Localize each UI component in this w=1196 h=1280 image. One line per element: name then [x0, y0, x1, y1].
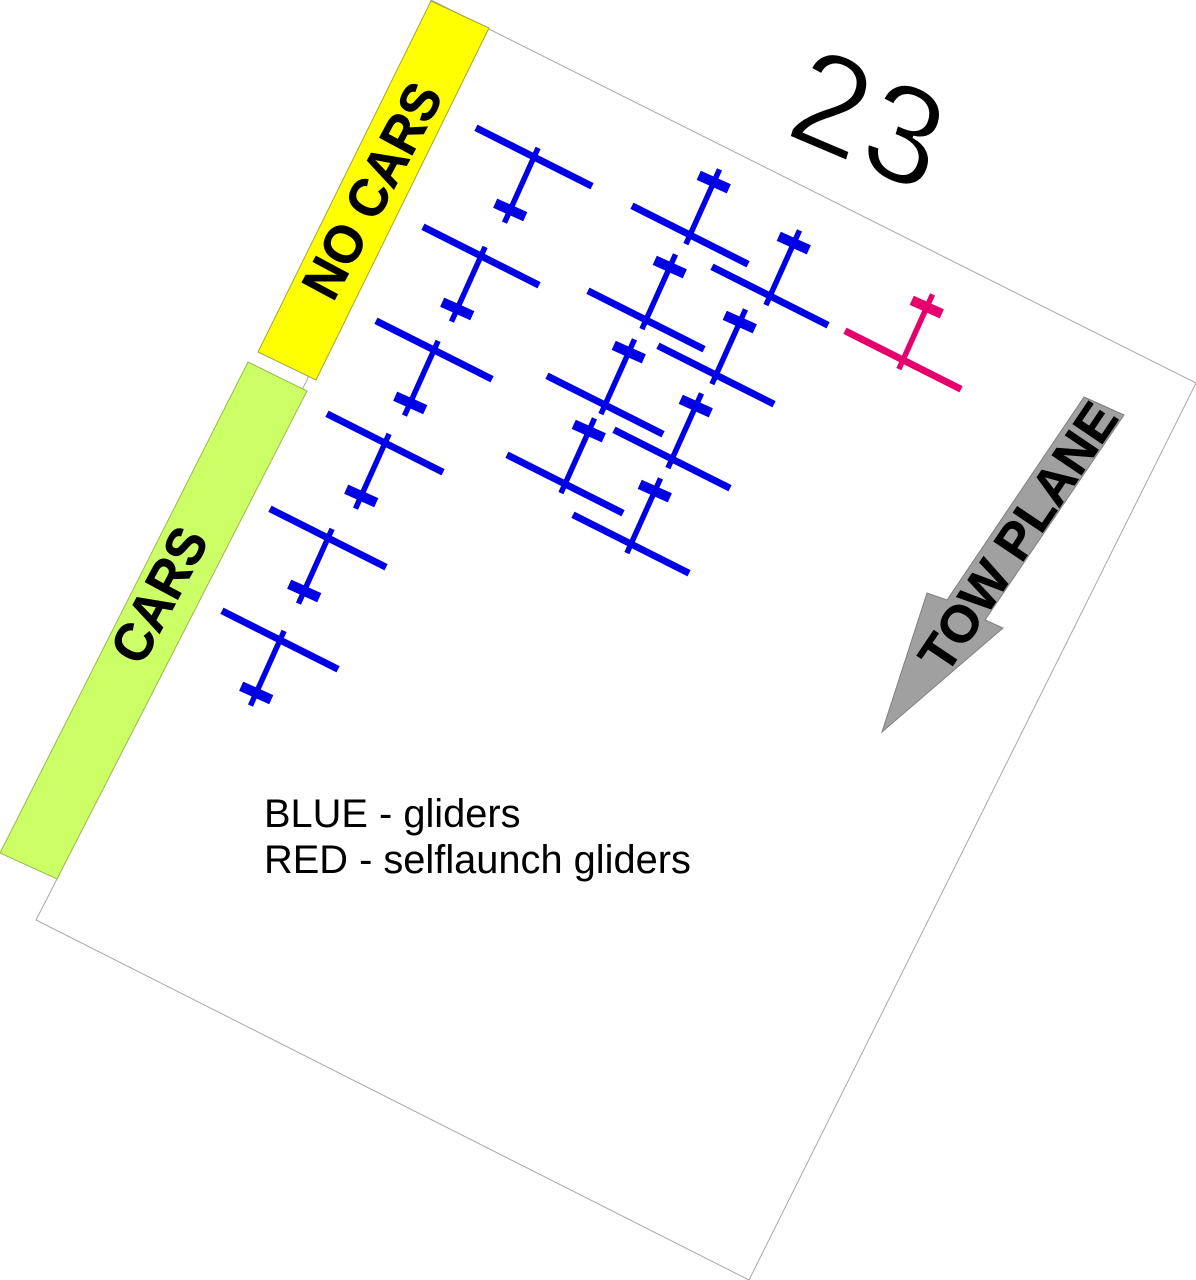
- cars zone: CARS: [99, 517, 221, 673]
- glider 7: [627, 141, 781, 274]
- glider 2: [390, 217, 544, 350]
- tow plane arrow: TOW PLANE: [908, 392, 1130, 683]
- glider 1: [443, 118, 597, 251]
- glider 10: [653, 281, 807, 414]
- gliders: left column: [189, 118, 597, 734]
- legend: RED - selflaunch gliders: [264, 838, 691, 882]
- glider 12: [609, 365, 763, 498]
- cars zone: [0, 362, 307, 879]
- glider 9: [583, 226, 737, 359]
- glider 8: [707, 202, 861, 335]
- selflaunch glider (red): [840, 266, 994, 399]
- no cars zone: NO CARS: [290, 73, 455, 309]
- no cars zone: [258, 1, 489, 380]
- glider 4: [294, 404, 448, 537]
- glider 14: [568, 450, 722, 583]
- legend: BLUE - gliders: [264, 792, 521, 836]
- glider 5: [237, 499, 391, 632]
- legend: [264, 792, 691, 882]
- glider 6: [189, 601, 343, 734]
- gliders: right group: [502, 141, 861, 583]
- glider 3: [343, 311, 497, 444]
- glider 13: [502, 390, 656, 523]
- runway number: 23: [774, 16, 965, 225]
- glider 11: [542, 311, 696, 444]
